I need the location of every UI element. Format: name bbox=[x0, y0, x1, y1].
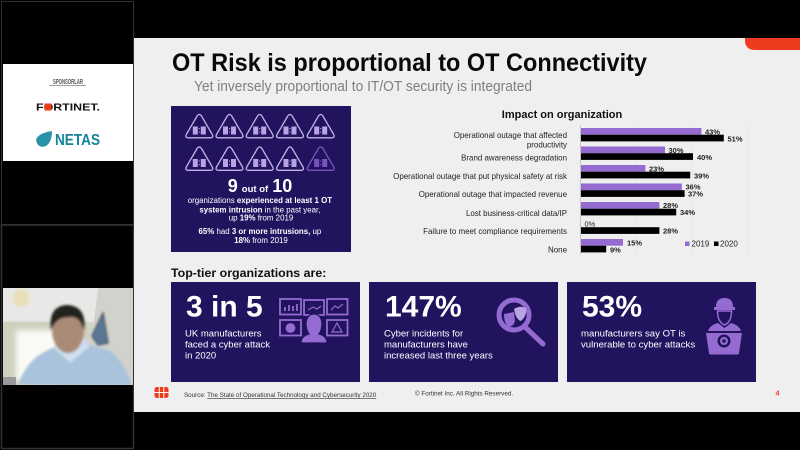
value labels: 9% bbox=[610, 246, 621, 254]
card 2 text: manufacturers have bbox=[384, 340, 468, 350]
category labels: Lost business-critical data/IP bbox=[466, 209, 567, 218]
value labels: 51% bbox=[728, 134, 743, 144]
secondary stat: 65% had 3 or more intrusions, up bbox=[198, 227, 321, 236]
picture frame bbox=[92, 313, 108, 345]
value labels: 28% bbox=[663, 226, 678, 236]
card 1 text: faced a cyber attack bbox=[185, 340, 270, 350]
legend: 2020 bbox=[720, 240, 738, 248]
source line: Source: The State of Operational Technology and Cybersecurity 2020 bbox=[184, 392, 377, 399]
card 3 text: manufacturers say OT is bbox=[581, 328, 686, 340]
webcam photo of speaker bbox=[3, 288, 133, 385]
title: OT Risk is proportional to OT Connectivity bbox=[172, 49, 647, 77]
value labels: 39% bbox=[694, 171, 709, 180]
value labels: 15% bbox=[627, 238, 642, 248]
value labels: 34% bbox=[680, 208, 695, 217]
card 3 text: vulnerable to cyber attacks bbox=[581, 340, 695, 350]
section heading: Top-tier organizations are: bbox=[171, 266, 326, 280]
left column frame bbox=[2, 2, 134, 448]
stat description: system intrusion in the past year, bbox=[199, 206, 320, 214]
panel: sponsors bbox=[3, 64, 133, 161]
category labels: None bbox=[548, 246, 568, 254]
icon: magnifier with masks bbox=[499, 300, 543, 344]
value labels bbox=[584, 128, 743, 254]
card 2 text: Cyber incidents for bbox=[384, 328, 463, 340]
bar chart: impact on organization bbox=[393, 125, 748, 254]
panel: 9 out of 10 bbox=[171, 106, 351, 252]
category labels: Operational outage that put physical safety at risk bbox=[393, 172, 567, 181]
value labels: 30% bbox=[668, 146, 684, 155]
orange corner tab bbox=[745, 38, 800, 50]
legend bbox=[685, 240, 738, 248]
slide background bbox=[134, 38, 800, 412]
card 3 number: 53% bbox=[582, 290, 642, 324]
sponsor heading: SPONSORLAR bbox=[53, 79, 83, 86]
icon: analyst with screens bbox=[280, 299, 348, 343]
logo: Fortinet: FORTINET. bbox=[36, 102, 100, 114]
copyright: © Fortinet Inc. All Rights Reserved. bbox=[415, 390, 513, 398]
value labels: 0% bbox=[584, 220, 596, 228]
card 2 text: increased last three years bbox=[384, 350, 493, 362]
bars 2020 bbox=[581, 135, 724, 252]
value labels: 37% bbox=[688, 190, 703, 199]
stat headline: 9 out of10 bbox=[228, 176, 292, 196]
lamp bbox=[13, 289, 29, 307]
category labels: productivity bbox=[527, 140, 567, 150]
secondary stat: 18% from 2019 bbox=[234, 236, 288, 245]
category labels: Brand awareness degradation bbox=[461, 154, 567, 162]
subtitle: Yet inversely proportional to IT/OT security is integrated bbox=[194, 79, 532, 95]
card 2 number: 147% bbox=[385, 290, 462, 324]
value labels: 28% bbox=[663, 201, 678, 210]
legend: 2019 bbox=[692, 240, 710, 248]
card 1 text: in 2020 bbox=[185, 350, 216, 362]
card 1 text: UK manufacturers bbox=[185, 328, 262, 340]
stat description: organizations experienced at least 1 OT bbox=[188, 196, 332, 205]
value labels: 40% bbox=[697, 153, 712, 162]
card: 3 in 5 bbox=[171, 282, 360, 382]
category labels bbox=[393, 131, 568, 254]
value labels: 23% bbox=[649, 164, 664, 173]
bars 2019 bbox=[581, 128, 701, 246]
icon grid: triangles bbox=[186, 114, 334, 170]
value labels: 36% bbox=[686, 183, 701, 192]
stat description: up 19% from 2019 bbox=[229, 214, 293, 222]
icon: engineer with laptop bbox=[706, 298, 742, 354]
card 1 number: 3 in 5 bbox=[186, 290, 263, 324]
chart heading: Impact on organization bbox=[502, 109, 622, 121]
category labels: Operational outage that impacted revenue bbox=[419, 190, 568, 199]
page number: 4 bbox=[776, 390, 780, 398]
category labels: Failure to meet compliance requirements bbox=[423, 227, 567, 236]
logo: Netas: NETAS bbox=[55, 132, 100, 149]
value labels: 43% bbox=[705, 128, 720, 136]
card: 147% bbox=[369, 282, 558, 382]
card: 53% bbox=[567, 282, 756, 382]
logo: red grid mark bbox=[154, 387, 168, 398]
category labels: Operational outage that affected bbox=[454, 131, 567, 140]
